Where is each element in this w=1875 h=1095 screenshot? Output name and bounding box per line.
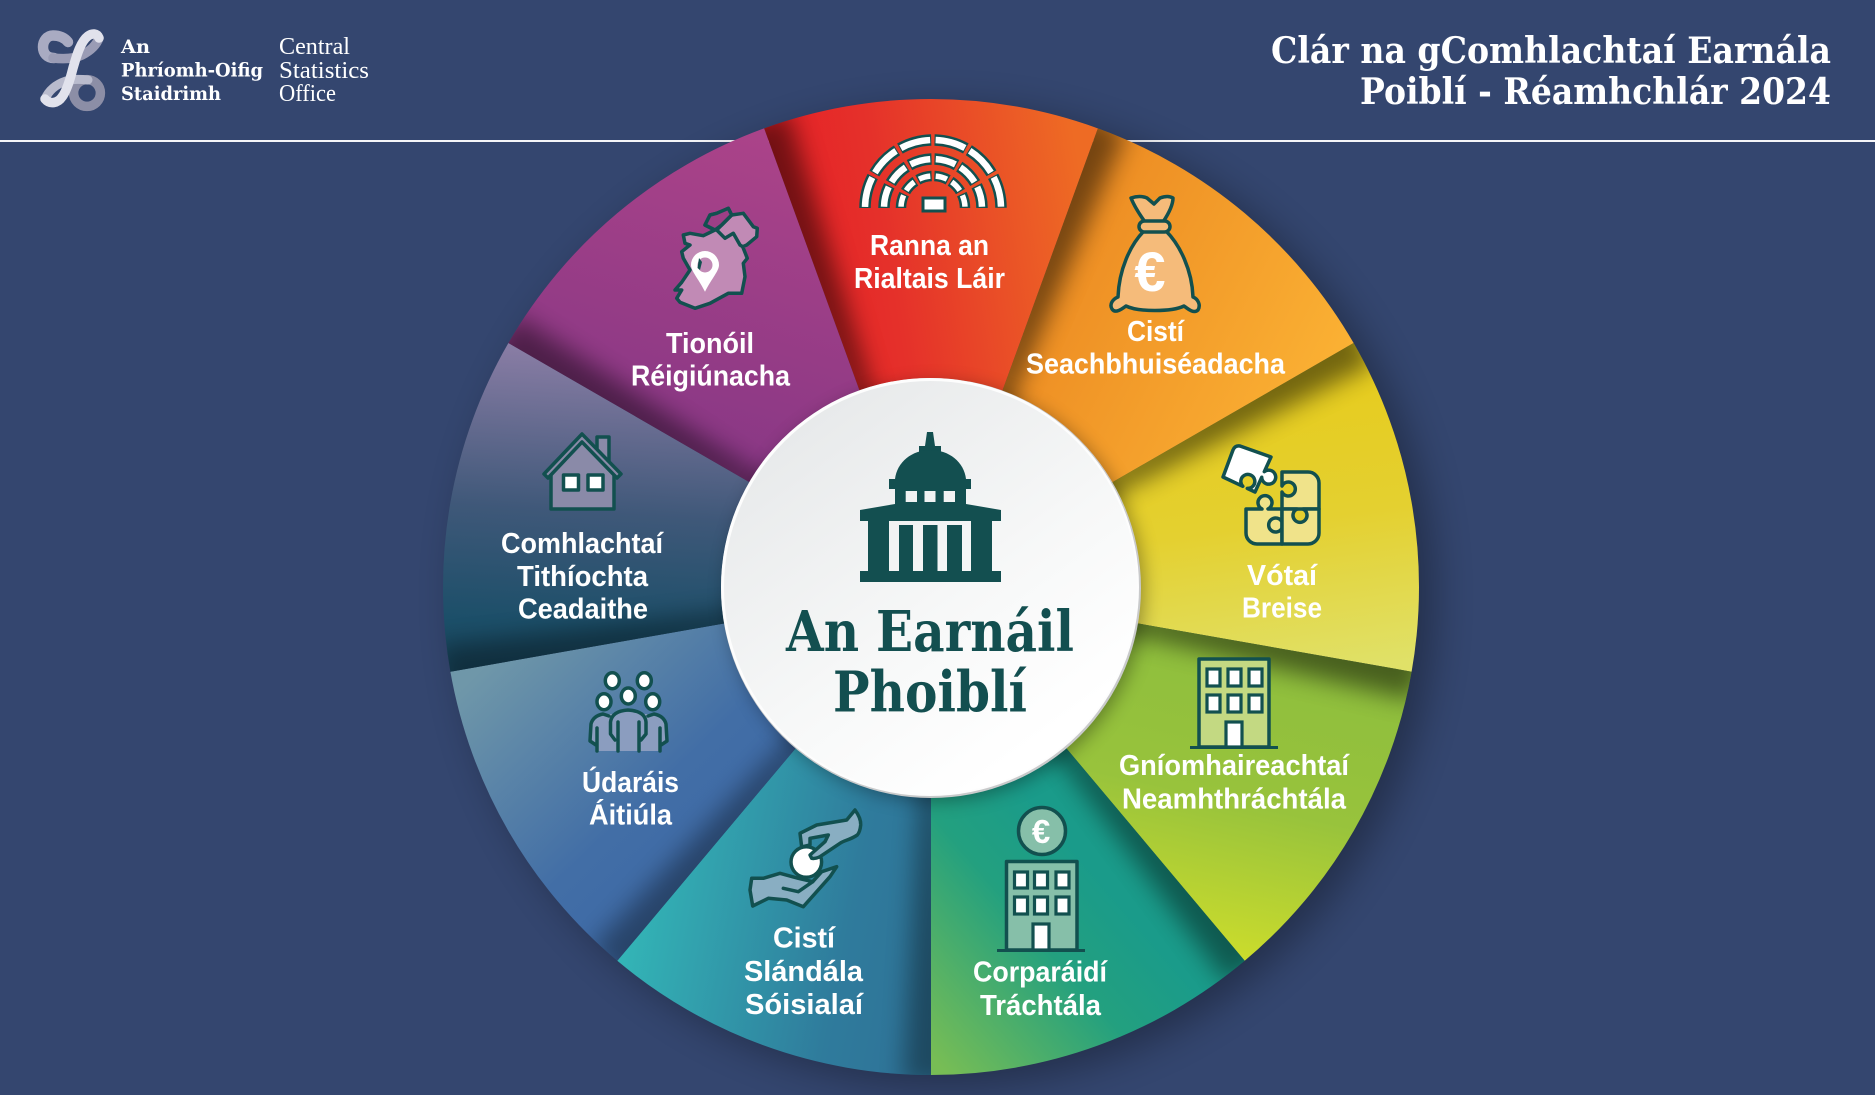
label: Corparáidí <box>973 956 1108 988</box>
icon: money bag: € <box>1134 240 1166 303</box>
circle <box>721 378 1141 798</box>
segment <box>1002 128 1354 482</box>
segment <box>1112 343 1419 672</box>
icon: building with euro coin: € <box>1032 813 1050 850</box>
label <box>744 922 864 1021</box>
icon: building with euro coin <box>997 808 1085 952</box>
icon: hands and coin <box>750 810 861 907</box>
title <box>1271 30 1831 113</box>
title: Poiblí - Réamhchlár 2024 <box>1360 71 1831 113</box>
segment <box>931 748 1245 1075</box>
panel: Cistí Slándála Sóisialaí <box>617 748 931 1075</box>
label: Sóisialaí <box>745 989 864 1021</box>
logo text: Irish: An <box>120 36 150 58</box>
panel: Cistí Seachbhuiséadacha <box>1002 128 1354 482</box>
icon: jigsaw puzzle <box>1223 446 1319 544</box>
segment <box>508 128 860 482</box>
icon: group of people <box>590 673 667 751</box>
label: Neamhthráchtála <box>1122 784 1347 816</box>
logo symbol <box>43 34 100 106</box>
label: Seachbhuiséadacha <box>1026 348 1286 380</box>
label: Breise <box>1242 592 1322 624</box>
label: Vótaí <box>1247 560 1318 592</box>
icon: parliament chamber <box>865 140 1001 211</box>
icon: government building <box>860 432 1001 582</box>
segment <box>764 99 1098 390</box>
logo text: Irish: Staidrimh <box>121 83 221 105</box>
logo text: Irish <box>120 36 263 105</box>
logo text: English: Statistics <box>279 58 369 84</box>
segment <box>450 624 796 960</box>
label: Ceadaithe <box>518 594 648 626</box>
label: Réigiúnacha <box>631 360 791 392</box>
header rule <box>0 140 1875 142</box>
wheel drop shadow <box>458 109 1434 1085</box>
panel: Corparáidí Tráchtála <box>931 748 1245 1075</box>
centre heading <box>785 599 1074 726</box>
label: Tithíochta <box>517 561 649 593</box>
panel: Údaráis Áitiúla <box>450 624 796 960</box>
icon: house <box>544 434 621 509</box>
label: Comhlachtaí <box>501 528 664 560</box>
label: Údaráis <box>582 767 679 799</box>
panel: Ranna an Rialtais Láir <box>764 99 1098 390</box>
icon: map of Ireland with pin <box>675 208 757 308</box>
label: Cistí <box>773 922 836 954</box>
label <box>501 528 664 626</box>
label: Slándála <box>744 956 864 988</box>
label <box>631 328 791 392</box>
label: Áitiúla <box>589 800 673 832</box>
centre heading: An Earnáil <box>785 599 1074 665</box>
label: Cistí <box>1127 316 1185 348</box>
logo text: Irish: Phríomh-Oifig <box>121 60 263 82</box>
logo text: English: Central <box>279 34 350 60</box>
panel: centre circle <box>721 378 1141 798</box>
label <box>854 230 1005 295</box>
panel: Tionóil Réigiúnacha <box>508 128 860 482</box>
icon: money bag <box>1111 196 1199 311</box>
title: Clár na gComhlachtaí Earnála <box>1271 30 1831 72</box>
segment <box>1066 624 1412 961</box>
logo text: English <box>279 34 369 107</box>
icon: office building <box>1190 659 1278 749</box>
segment <box>443 343 750 672</box>
label: Tionóil <box>666 328 754 360</box>
centre heading: Phoiblí <box>833 660 1027 726</box>
panel: Gníomhaireachtaí Neamhthráchtála <box>1066 624 1412 961</box>
segment <box>617 748 931 1075</box>
label <box>582 767 679 832</box>
logo text: English: Office <box>279 81 336 107</box>
label: Tráchtála <box>980 990 1102 1022</box>
label <box>1026 316 1286 380</box>
logo: Central Statistics Office <box>43 34 369 107</box>
label: Ranna an <box>870 230 989 262</box>
panel: Comhlachtaí Tithíochta Ceadaithe <box>443 343 750 672</box>
label: Rialtais Láir <box>854 263 1005 295</box>
label <box>1242 560 1322 624</box>
label: Gníomhaireachtaí <box>1119 750 1350 782</box>
panel: Vótaí Breise <box>1112 343 1419 672</box>
centre shadow <box>726 383 1144 801</box>
label <box>1119 750 1350 816</box>
label <box>973 956 1108 1022</box>
